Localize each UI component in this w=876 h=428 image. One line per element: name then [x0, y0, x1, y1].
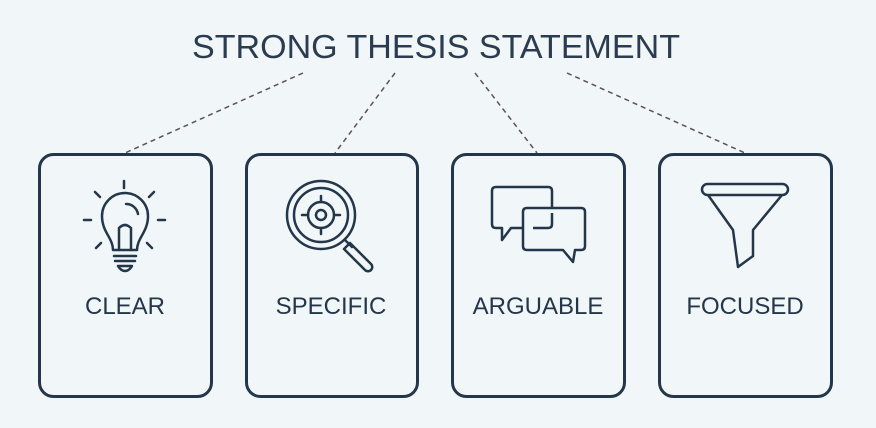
- label: specific: SPECIFIC: [276, 293, 386, 320]
- icon: magnifier target: [287, 181, 372, 271]
- label: clear: CLEAR: [85, 293, 165, 320]
- panel: focused: [660, 154, 832, 396]
- connector lines: [125, 73, 745, 153]
- title: STRONG THESIS STATEMENT: [192, 28, 680, 65]
- panel: clear: [40, 154, 212, 396]
- label: focused: FOCUSED: [686, 293, 804, 320]
- icon: funnel: [702, 184, 788, 267]
- icon: light bulb: [84, 181, 165, 271]
- panel: arguable: [452, 154, 624, 396]
- label: arguable: ARGUABLE: [473, 293, 603, 320]
- panel: specific: [246, 154, 418, 396]
- icon: speech bubbles: [492, 187, 585, 262]
